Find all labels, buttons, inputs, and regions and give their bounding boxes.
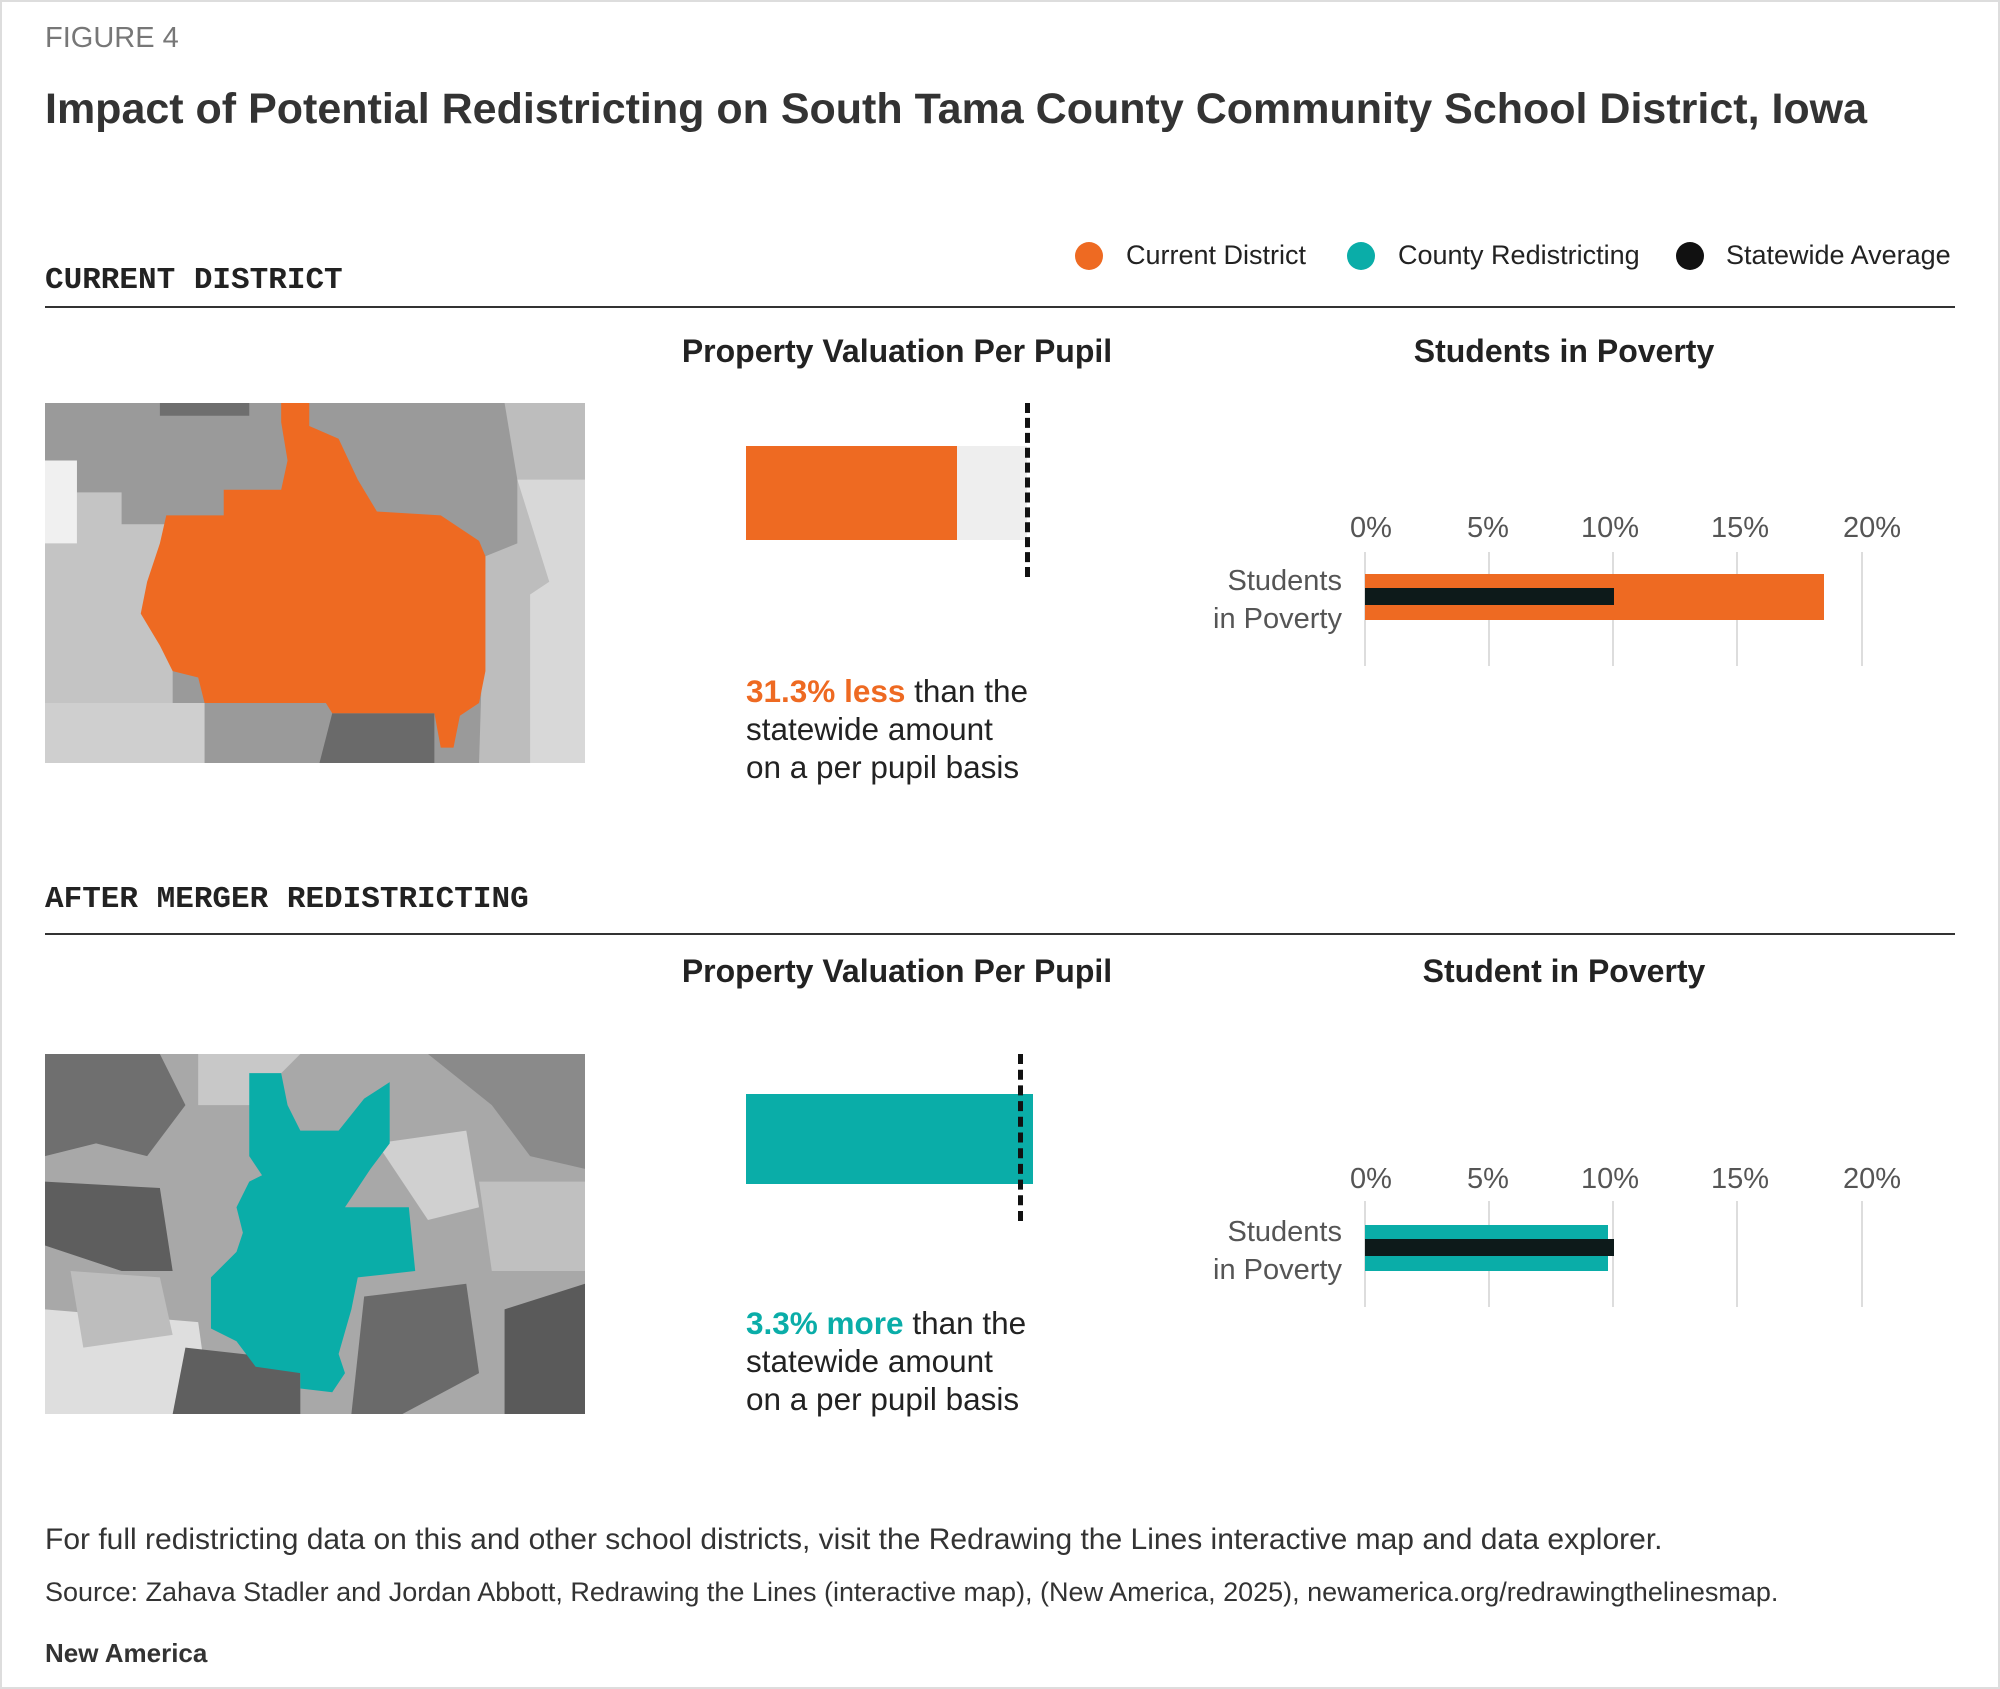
text: 31.3% less: on a per pupil basis <box>746 749 1019 785</box>
poverty chart current <box>1213 512 1901 666</box>
heading: poverty 2: Student in Poverty <box>1423 953 1705 989</box>
source: Source: Zahava Stadler and Jordan Abbott, Redrawing the Lines (interactive map), (New America, 2025), newamerica.org/redrawingthelinesmap. <box>45 1577 1778 1607</box>
map: after merger <box>45 1054 585 1414</box>
section heading: current district: CURRENT DISTRICT <box>45 263 343 298</box>
legend: Statewide Average <box>1726 240 1951 270</box>
text: 31.3% less: statewide amount <box>746 711 993 747</box>
heading: property valuation 1: Property Valuation Per Pupil <box>682 333 1112 369</box>
poverty chart after: 10% <box>1581 1163 1639 1195</box>
map: current district <box>45 403 585 763</box>
text: 3.3% more: on a per pupil basis <box>746 1381 1019 1417</box>
poverty chart current: 0% <box>1350 512 1392 544</box>
text: 31.3% less <box>746 673 1028 785</box>
bar chart: property valuation current <box>746 403 1030 577</box>
poverty chart after: 15% <box>1711 1163 1769 1195</box>
legend: Current District <box>1126 240 1306 270</box>
poverty chart current: 5% <box>1467 512 1509 544</box>
credit: New America <box>45 1638 207 1668</box>
title: Impact of Potential Redistricting on South Tama County Community School District, Iowa <box>45 85 1867 133</box>
poverty chart after <box>1213 1163 1901 1307</box>
poverty chart after: 0% <box>1350 1163 1392 1195</box>
legend <box>1075 240 1951 270</box>
poverty chart current: 15% <box>1711 512 1769 544</box>
footer note: For full redistricting data on this and other school districts, visit the Redrawing the Lines interactive map and data explorer. <box>45 1523 1662 1556</box>
text: 3.3% more: statewide amount <box>746 1343 993 1379</box>
heading: poverty 1: Students in Poverty <box>1414 333 1714 369</box>
poverty chart after: 5% <box>1467 1163 1509 1195</box>
poverty chart current: 10% <box>1581 512 1639 544</box>
text: 3.3% more <box>746 1305 1026 1417</box>
text: 3.3% more: 3.3% more than the <box>746 1305 1026 1341</box>
poverty chart after: Students <box>1228 1216 1342 1248</box>
bar chart: property valuation after <box>746 1054 1033 1221</box>
heading: property valuation 2: Property Valuation Per Pupil <box>682 953 1112 989</box>
poverty chart current: 20% <box>1843 512 1901 544</box>
poverty chart after: in Poverty <box>1213 1254 1342 1286</box>
figure label: FIGURE 4 <box>45 22 179 54</box>
section heading: after merger: AFTER MERGER REDISTRICTING <box>45 882 529 917</box>
text: 31.3% less: 31.3% less than the <box>746 673 1028 709</box>
legend: County Redistricting <box>1398 240 1640 270</box>
poverty chart current: in Poverty <box>1213 603 1342 635</box>
poverty chart after: 20% <box>1843 1163 1901 1195</box>
poverty chart current: Students <box>1228 565 1342 597</box>
